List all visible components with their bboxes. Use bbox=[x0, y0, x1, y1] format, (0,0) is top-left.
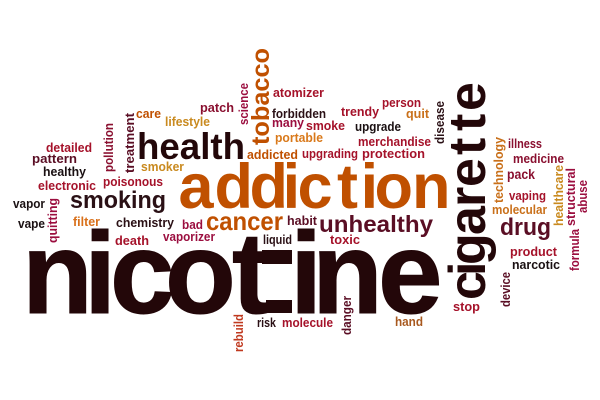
word: unhealthy: unhealthy bbox=[319, 211, 433, 237]
word: chemistry: chemistry bbox=[116, 215, 175, 230]
word: cancer: cancer bbox=[206, 206, 283, 236]
word: habit: habit bbox=[287, 213, 318, 228]
word: forbidden: forbidden bbox=[272, 106, 326, 121]
word: smoking: smoking bbox=[70, 187, 166, 214]
word: liquid: liquid bbox=[263, 232, 292, 247]
word: healthcare: healthcare bbox=[551, 165, 566, 226]
word: upgrade: upgrade bbox=[355, 119, 401, 134]
word: smoke: smoke bbox=[306, 118, 345, 133]
word: trendy: trendy bbox=[341, 104, 380, 119]
word: portable: portable bbox=[275, 130, 323, 145]
word: merchandise: merchandise bbox=[358, 134, 431, 149]
word: illness: illness bbox=[508, 136, 542, 151]
word: science: science bbox=[236, 83, 251, 125]
word: toxic: toxic bbox=[330, 232, 360, 247]
word: bad: bad bbox=[182, 217, 203, 232]
word: vapor: vapor bbox=[13, 196, 45, 211]
word: many: many bbox=[272, 115, 305, 130]
word: tobacco: tobacco bbox=[247, 48, 275, 145]
word: vape: vape bbox=[18, 216, 45, 231]
word: technology: technology bbox=[491, 136, 506, 203]
word: molecular: molecular bbox=[492, 202, 547, 217]
word: addiction: addiction bbox=[178, 152, 450, 222]
word: formula: formula bbox=[567, 228, 582, 271]
word: vaping: vaping bbox=[509, 188, 546, 203]
word: quitting: quitting bbox=[45, 198, 60, 243]
word: danger: danger bbox=[339, 296, 354, 335]
word: poisonous: poisonous bbox=[103, 174, 163, 189]
word: risk: risk bbox=[257, 315, 277, 330]
word: device: device bbox=[498, 272, 513, 307]
word: patch: patch bbox=[200, 100, 234, 115]
word: death: death bbox=[115, 233, 149, 248]
word: structural: structural bbox=[563, 168, 578, 226]
word: nicotine: nicotine bbox=[22, 208, 443, 338]
word: person: person bbox=[382, 95, 421, 110]
word: stop: stop bbox=[453, 299, 480, 314]
word: abuse: abuse bbox=[575, 180, 590, 213]
word: smoker: smoker bbox=[141, 159, 184, 174]
word: treatment: treatment bbox=[122, 112, 137, 173]
word: disease: disease bbox=[432, 101, 447, 144]
word: electronic: electronic bbox=[38, 178, 96, 193]
word: filter: filter bbox=[73, 214, 100, 229]
word: drug: drug bbox=[500, 214, 551, 241]
word: upgrading: upgrading bbox=[302, 146, 358, 161]
word: health: health bbox=[137, 126, 245, 167]
word: quit: quit bbox=[406, 106, 430, 121]
word: addicted: addicted bbox=[247, 147, 298, 162]
word: pack: pack bbox=[507, 166, 535, 182]
word: detailed: detailed bbox=[46, 140, 92, 155]
word: cigarette: cigarette bbox=[439, 82, 497, 300]
word: pollution: pollution bbox=[101, 123, 116, 172]
word: lifestyle: lifestyle bbox=[165, 114, 210, 129]
word: molecule: molecule bbox=[282, 315, 333, 330]
word: healthy: healthy bbox=[43, 164, 87, 179]
word: product: product bbox=[510, 244, 558, 259]
word: medicine: medicine bbox=[513, 151, 564, 166]
word: atomizer: atomizer bbox=[273, 85, 324, 100]
word: care: care bbox=[136, 106, 161, 121]
word: vaporizer: vaporizer bbox=[163, 229, 215, 244]
word: protection: protection bbox=[362, 146, 425, 161]
word: rebuild: rebuild bbox=[231, 314, 246, 352]
word: pattern: pattern bbox=[32, 151, 77, 166]
word: narcotic: narcotic bbox=[512, 257, 560, 272]
word: hand: hand bbox=[395, 314, 423, 329]
